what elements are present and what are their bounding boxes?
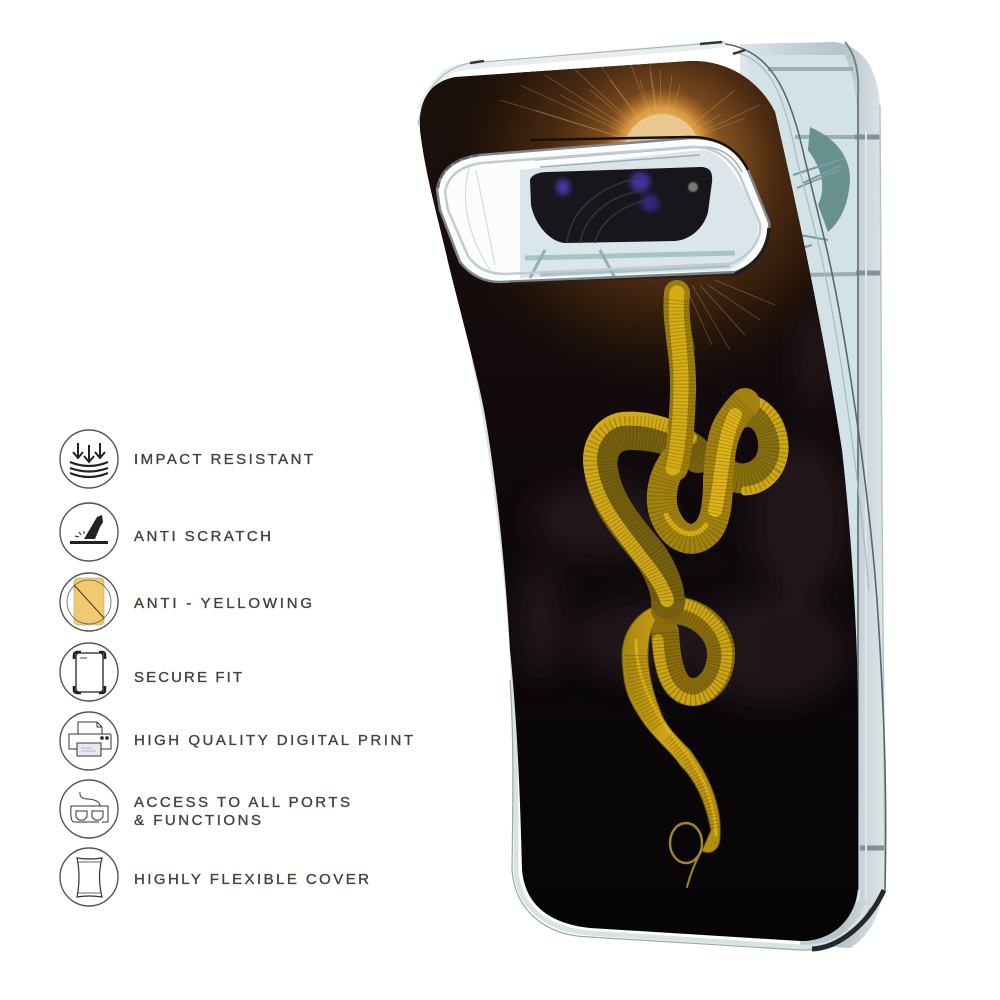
feature: secure fit: SECURE FIT [134,669,242,686]
feature: high quality digital print: HIGH QUALITY DIGITAL PRINT [134,732,413,749]
panel: feature list [60,430,413,906]
snake: centre coil [662,403,745,539]
snake: right loop [720,399,784,491]
blue-grey camera well [520,150,758,278]
snake: left loop [590,419,698,602]
feature: highly flexible cover [60,848,369,906]
camera cutout [437,137,769,283]
phone back glass [745,55,860,940]
feature: impact resistant [60,430,313,488]
camera lens bar [530,167,712,243]
sun halo [607,90,716,144]
feature: anti scratch [60,503,271,561]
feature: secure fit [60,643,242,701]
feature: anti yellowing: ANTI - YELLOWING [134,595,312,612]
icon: blade scratching surface [60,503,118,561]
label: access to all ports and functions [134,794,350,829]
feature: anti yellowing [60,573,312,631]
camera ring behind case [808,127,850,232]
snake: lower coil [658,602,727,700]
clear case edge [418,42,886,950]
icon: ports [60,780,118,838]
snake [590,293,784,887]
icon: phone with corner bumpers [60,643,118,701]
icon: yellow cover crossed out [60,573,118,631]
icon: printer [60,712,118,770]
panel: printed cover artwork [420,61,858,941]
snake: neck and head [673,293,683,468]
label: access to all ports and functions: & FUNCTIONS [134,812,261,829]
feature: access to all ports [60,780,350,838]
label: access to all ports and functions: ACCESS TO ALL PORTS [134,794,350,811]
nebula clouds [515,305,850,705]
lens glass reflections [535,147,742,172]
feature: highly flexible cover: HIGHLY FLEXIBLE COVER [134,871,369,888]
phone body behind cover [740,42,885,948]
icon: flexed cover [60,848,118,906]
sun glow [466,61,819,362]
feature: high quality digital print [60,712,413,770]
moon [625,114,696,142]
snake: lower tail [622,603,720,887]
feature: impact resistant: IMPACT RESISTANT [134,451,313,468]
feature: anti scratch: ANTI SCRATCH [134,528,271,545]
clear camera rim [437,138,769,282]
icon: impact arrows [60,430,118,488]
sun rays [500,62,775,350]
